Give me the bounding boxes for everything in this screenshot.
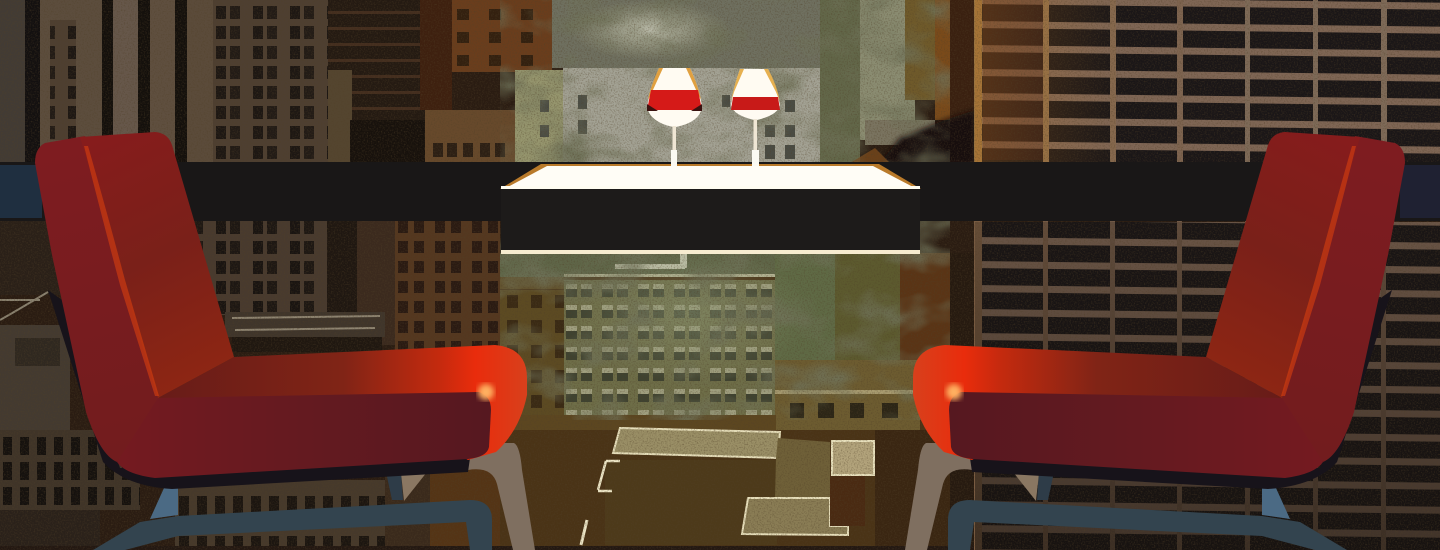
table body [501, 188, 920, 250]
right red chair [905, 132, 1405, 550]
background: right slatted tower upper [974, 0, 1440, 162]
table top gold rim [500, 164, 921, 189]
ledge: blue right end [1400, 165, 1440, 218]
texture: marble blotches over center [500, 0, 950, 420]
background: right slatted tower lower [974, 220, 1440, 550]
table top surface [506, 166, 915, 188]
background: center city lower [0, 250, 975, 550]
ledge: blue left end [0, 165, 42, 218]
wine glass left [647, 68, 702, 166]
wine glass right [731, 69, 780, 166]
background: left towers [0, 0, 520, 550]
left red chair [35, 132, 535, 550]
rooftops [581, 428, 874, 545]
background: center city upper [420, 0, 975, 165]
ledge: dark horizontal band [0, 162, 1440, 221]
table lower light strip [501, 250, 920, 254]
table [500, 164, 921, 254]
